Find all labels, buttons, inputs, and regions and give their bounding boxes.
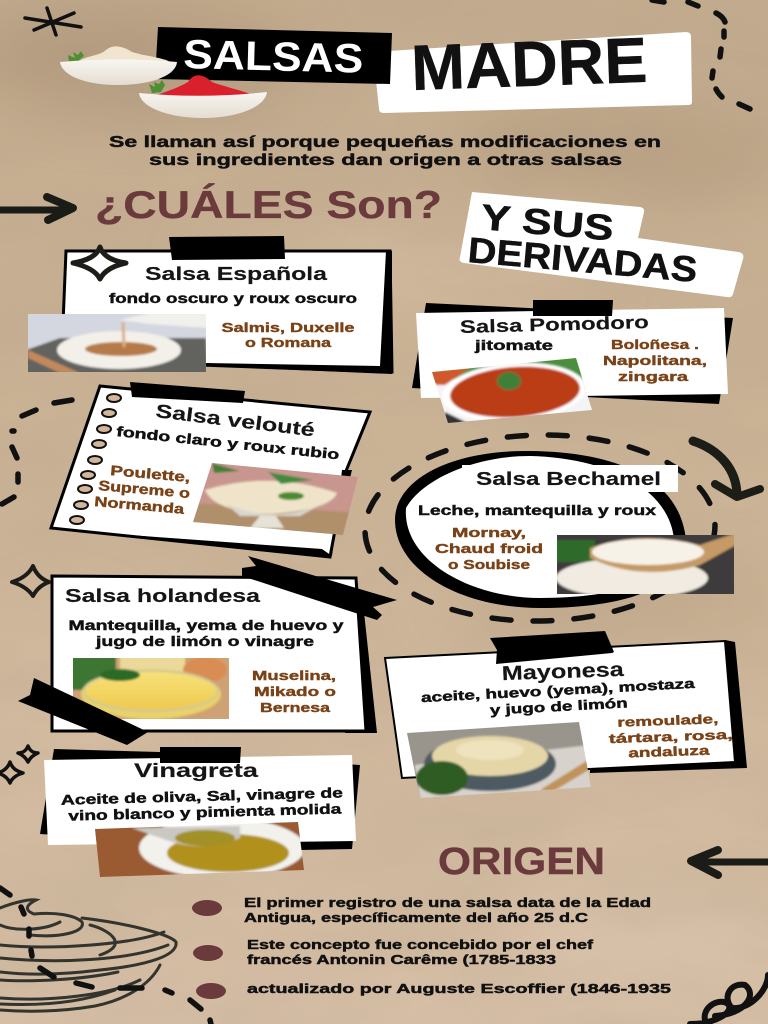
icon: asterisk doodle bbox=[25, 8, 81, 35]
tape bbox=[160, 747, 241, 763]
subtitle text: sus ingredientes dan origen a otras salsas bbox=[149, 152, 622, 169]
ingredients bbox=[61, 784, 343, 824]
derivatives: Mikado o bbox=[254, 684, 336, 699]
card bbox=[416, 308, 728, 398]
fact 1: Antigua, específicamente del año 25 d.C bbox=[244, 911, 588, 925]
derivatives: Mornay, bbox=[452, 525, 526, 540]
ingredients: vino blanco y pimienta molida bbox=[68, 800, 342, 824]
ingredient: jitomate bbox=[474, 337, 553, 353]
dashed doodle top right bbox=[652, 0, 750, 109]
ingredients: fondo oscuro y roux oscuro bbox=[109, 291, 357, 306]
fact 1 bbox=[244, 896, 651, 925]
title word SALSAS: SALSAS bbox=[183, 31, 364, 82]
panel: salsa velouté bbox=[51, 382, 370, 557]
ingredients: Aceite de oliva, Sal, vinagre de bbox=[61, 784, 343, 808]
card bbox=[385, 641, 735, 778]
card bbox=[62, 251, 392, 372]
card shadow bbox=[345, 577, 377, 733]
heading text: DERIVADAS bbox=[466, 229, 699, 290]
card shadow bbox=[412, 303, 733, 404]
title: Mayonesa bbox=[501, 659, 625, 685]
icons: small stars bbox=[0, 746, 38, 783]
image: gravy bowl bbox=[26, 312, 208, 374]
dashed doodle around velouté bbox=[2, 400, 72, 504]
derivatives: Bernesa bbox=[260, 700, 331, 715]
notebook rings bbox=[70, 394, 121, 524]
panel: salsa española bbox=[26, 236, 392, 374]
title: Salsa Pomodoro bbox=[460, 312, 649, 337]
derivatives: o Soubise bbox=[448, 557, 530, 572]
derivatives: Normanda bbox=[94, 493, 185, 517]
title: Salsa Española bbox=[145, 264, 328, 284]
fact 3: actualizado por Auguste Escoffier (1846-1935 bbox=[247, 981, 671, 996]
tape bbox=[130, 382, 245, 403]
heading text: Y SUS bbox=[479, 196, 615, 249]
icon: star outline bbox=[73, 247, 126, 279]
derivatives: tártara, rosa, bbox=[609, 727, 733, 746]
fact 2: Este concepto fue concebido por el chef bbox=[247, 938, 594, 952]
derivatives bbox=[94, 462, 191, 517]
title label bbox=[462, 465, 678, 492]
title word MADRE: MADRE bbox=[410, 24, 648, 104]
title: Salsa holandesa bbox=[65, 586, 261, 606]
heading: cuales son: ¿CUÁLES Son? bbox=[95, 183, 442, 227]
icon: star outline bbox=[12, 566, 49, 596]
ingredients: fondo claro y roux rubio bbox=[116, 423, 340, 462]
list: origin timeline bbox=[192, 896, 671, 999]
derivatives: andaluza bbox=[628, 743, 711, 760]
card bbox=[44, 755, 356, 845]
bullet 2 bbox=[193, 945, 223, 961]
heading: origen: ORIGEN bbox=[438, 841, 605, 883]
bullet 3 bbox=[196, 983, 226, 999]
derivatives: remoulade, bbox=[617, 711, 719, 730]
derivatives bbox=[252, 668, 336, 715]
black blob bbox=[395, 451, 686, 608]
panel: vinagreta bbox=[40, 747, 360, 880]
heading: y sus derivadas bbox=[460, 192, 743, 297]
title bbox=[60, 24, 692, 118]
panel: salsa holandesa bbox=[12, 556, 397, 745]
ingredients: Mantequilla, yema de huevo y bbox=[68, 617, 344, 633]
icon: squiggle bbox=[690, 975, 768, 1024]
panel: salsa pomodoro bbox=[412, 300, 733, 426]
card shadow bbox=[590, 640, 747, 773]
image: tomato sauce bbox=[430, 356, 594, 426]
ingredients: Leche, mantequilla y roux bbox=[418, 502, 656, 518]
derivatives: Chaud froid bbox=[435, 541, 543, 556]
icon: white sauce bowl bbox=[60, 46, 177, 85]
tape top right bbox=[242, 556, 397, 620]
card shadow bbox=[40, 749, 360, 850]
derivatives: Salmis, Duxelle bbox=[222, 320, 354, 335]
ingredients bbox=[421, 676, 696, 718]
derivatives: Supreme o bbox=[98, 477, 191, 501]
derivatives bbox=[222, 320, 354, 350]
dashed circle around bechamel bbox=[363, 432, 717, 624]
ingredients bbox=[68, 617, 344, 649]
tape bbox=[533, 300, 613, 316]
panel bbox=[460, 192, 743, 297]
fact 2: francés Antonin Carême (1785-1833 bbox=[247, 953, 556, 967]
derivatives bbox=[603, 337, 707, 384]
derivatives: Poulette, bbox=[110, 462, 191, 485]
title: Salsa Bechamel bbox=[476, 469, 661, 489]
white blob bbox=[406, 456, 674, 598]
image: velouté in glass bbox=[190, 460, 360, 537]
fact 2 bbox=[247, 938, 594, 967]
title: Vinagreta bbox=[134, 761, 259, 782]
panel: mayonesa bbox=[385, 631, 747, 802]
card shadow bbox=[60, 470, 352, 557]
card shadow bbox=[206, 251, 392, 374]
banner: SALSAS black panel bbox=[155, 27, 392, 84]
derivatives: zingara bbox=[618, 369, 689, 384]
derivatives: Boloñesa . bbox=[611, 337, 699, 352]
image: vinaigrette bbox=[95, 822, 304, 877]
title: Salsa velouté bbox=[154, 401, 316, 441]
image: hollandaise bowl bbox=[71, 656, 231, 721]
tape bbox=[169, 236, 285, 260]
image: mayonnaise dish bbox=[407, 722, 591, 798]
banner: MADRE white panel bbox=[373, 32, 692, 113]
icon: arrow pointing left bbox=[691, 850, 768, 875]
card bbox=[52, 576, 366, 731]
subtitle text: Se llaman así porque pequeñas modificaciones en bbox=[109, 134, 661, 151]
subtitle text bbox=[109, 134, 661, 169]
ingredients: aceite, huevo (yema), mostaza bbox=[421, 676, 696, 705]
image: sauce with spoon bbox=[557, 535, 734, 594]
ingredients: y jugo de limón bbox=[489, 695, 628, 718]
heading text bbox=[466, 196, 699, 290]
fact 1: El primer registro de una salsa data de la Edad bbox=[244, 896, 651, 910]
bullet 1 bbox=[192, 900, 222, 916]
card bbox=[51, 386, 370, 557]
icon: line art bowl bbox=[0, 900, 176, 1011]
ingredients: jugo de limón o vinagre bbox=[95, 633, 314, 649]
icon: arrow pointing right bbox=[0, 197, 73, 220]
derivatives: Muselina, bbox=[252, 668, 336, 683]
tape bottom left bbox=[18, 678, 148, 745]
derivatives bbox=[435, 525, 543, 572]
derivatives bbox=[609, 711, 733, 760]
dashed doodle around bowl bbox=[0, 888, 211, 1024]
panel: salsa bechamel bbox=[395, 451, 736, 608]
derivatives: Napolitana, bbox=[603, 353, 707, 368]
icon: curved arrow bbox=[693, 441, 760, 497]
icon: tomato sauce bowl bbox=[139, 75, 267, 118]
derivatives: o Romana bbox=[245, 335, 332, 350]
tape bbox=[490, 631, 614, 664]
